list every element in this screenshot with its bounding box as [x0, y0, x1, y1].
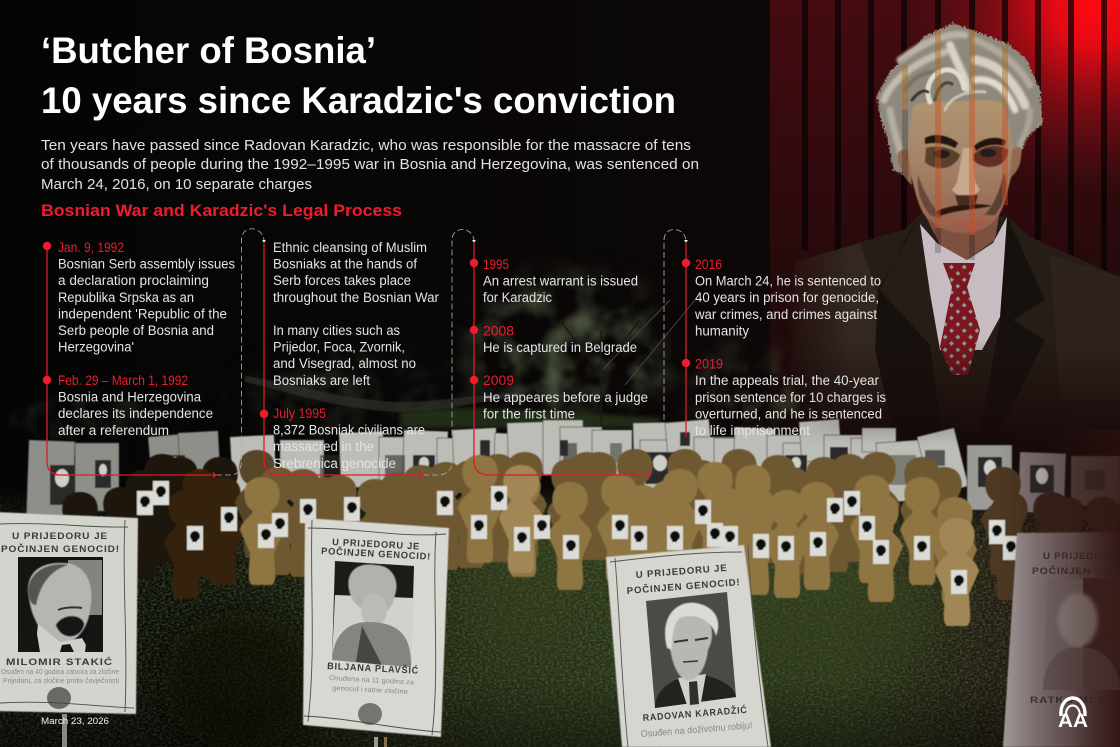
timeline column 2: Bosniaks are left [273, 373, 370, 388]
timeline column 4: 2019 [695, 357, 723, 372]
timeline column 2: Bosniaks at the hands of [273, 257, 417, 272]
intro paragraph: Ten years have passed since Radovan Karadzic, who was responsible for the massacre of tens [41, 137, 691, 154]
child photo cards [137, 481, 1019, 594]
timeline column 2: and Visegrad, almost no [273, 356, 416, 371]
poster: Biljana Plavsic: genocid i ratne zločine [332, 685, 408, 696]
timeline column 2: Prijedor, Foca, Zvornik, [273, 340, 405, 355]
timeline column 3: for Karadzic [483, 290, 552, 305]
poster: Milomir Stakic: Osuđen na 40 godina zatvora za zločine [1, 669, 119, 676]
title: ‘Butcher of Bosnia’ [41, 30, 376, 71]
timeline column 4: 2016 [695, 257, 722, 272]
poster: Milomir Stakic: POČINJEN GENOCID! [1, 543, 120, 555]
timeline column 3: He is captured in Belgrade [483, 340, 637, 355]
timeline column 1: declares its independence [58, 406, 213, 421]
date: March 23, 2026 [41, 716, 109, 726]
tie [940, 263, 980, 375]
timeline dots [43, 242, 690, 418]
timeline column 3: He appeares before a judge [483, 390, 648, 405]
timeline column 2: massacred in the [273, 439, 374, 454]
poster: Milomir Stakic: MILOMIR STAKIĆ [6, 656, 113, 668]
timeline column 3: 1995 [483, 257, 509, 272]
timeline column 1 [58, 240, 235, 438]
intro paragraph: March 24, 2016, on 10 separate charges [41, 176, 312, 193]
timeline column 2: throughout the Bosnian War [273, 290, 439, 305]
timeline column 4: On March 24, he is sentenced to [695, 274, 881, 289]
cut-out child figures [58, 449, 1120, 626]
poster: Radovan Karadzic: POČINJEN GENOCID! [626, 576, 741, 597]
timeline column 4: to life imprisonment [695, 423, 810, 438]
poster: Biljana Plavsic [303, 518, 449, 747]
timeline column 4: 40 years in prison for genocide, [695, 290, 879, 305]
poster: Ratko Mladic: U PRIJEDORU [1043, 551, 1118, 562]
shirt [920, 217, 1007, 350]
facial shadows [918, 135, 1008, 229]
timeline column 1: Bosnian Serb assembly issues [58, 257, 235, 272]
timeline column 4: war crimes, and crimes against [694, 307, 877, 322]
timeline column 1: Bosnia and Herzegovina [58, 390, 201, 405]
timeline column 1: Republika Srpska as an [58, 290, 194, 305]
photo: grass field [0, 480, 1120, 747]
face [908, 100, 1014, 233]
timeline column 1: Serb people of Bosnia and [58, 323, 214, 338]
icon: AA logo: AA [1058, 711, 1088, 732]
poster: Ratko Mladic: POČINJEN GEN [1032, 565, 1120, 577]
poster: Radovan Karadzic: Osuđen na doživotnu robiju! [640, 720, 753, 740]
poster: Milomir Stakic [0, 512, 138, 747]
portrait: Radovan Karadzic [790, 23, 1120, 460]
timeline column 2: Ethnic cleansing of Muslim [273, 240, 427, 255]
timeline column 1: Feb. 29 – March 1, 1992 [58, 373, 188, 388]
orange stripes over hair and face [902, 30, 1008, 260]
timeline column 4: In the appeals trial, the 40-year [695, 373, 879, 388]
timeline column 1: after a referendum [58, 423, 169, 438]
timeline column 2: Serb forces takes place [273, 273, 411, 288]
timeline column 2: 8,372 Bosniak civilians are [273, 423, 425, 438]
timeline column 3: 2009 [483, 373, 514, 388]
timeline column 3: An arrest warrant is issued [483, 274, 638, 289]
poster: Biljana Plavsic: POČINJEN GENOCID! [321, 545, 431, 563]
poster: Ratko Mladic [1003, 532, 1120, 747]
title: 10 years since Karadzic's conviction [41, 80, 676, 121]
neck [925, 210, 1000, 260]
timeline column 3: for the first time [483, 406, 575, 421]
poster: Radovan Karadzic: U PRIJEDORU JE [635, 563, 728, 581]
poster: Biljana Plavsic: U PRIJEDORU JE [332, 537, 420, 553]
timeline column 1: Jan. 9, 1992 [58, 240, 124, 255]
timeline column 4 [694, 257, 886, 438]
timeline column 1: Herzegovina' [58, 340, 134, 355]
timeline connectors [47, 229, 688, 478]
timeline column 4: prison sentence for 10 charges is [695, 390, 886, 405]
intro paragraph: of thousands of people during the 1992–1995 war in Bosnia and Herzegovina, was sentenced on [41, 156, 699, 173]
hair mass [877, 23, 1043, 178]
timeline column 1: a declaration proclaiming [58, 273, 209, 288]
forehead curl [912, 70, 985, 110]
title [41, 30, 676, 121]
back row of posters [26, 419, 1120, 516]
poster: Milomir Stakic: Prijedoru, za zločine protiv čovječnosti [3, 678, 119, 685]
faces on back posters [55, 455, 1048, 487]
intro paragraph [41, 137, 699, 193]
poster: Biljana Plavsic: Osuđena na 11 godina za [329, 675, 414, 686]
icon: AA logo [1058, 698, 1088, 732]
timeline column 4: overturned, and he is sentenced [695, 406, 882, 421]
poster: Radovan Karadzic [606, 545, 771, 747]
timeline column 2: Srebrenica genocide [273, 456, 396, 471]
poster: Milomir Stakic: U PRIJEDORU JE [12, 531, 108, 542]
right edge fade [1000, 430, 1120, 747]
timeline column 3: 2008 [483, 323, 514, 338]
section heading: Bosnian War and Karadzic's Legal Process [41, 201, 402, 220]
panel: red striped backdrop [770, 0, 1120, 470]
back poster photos [50, 432, 1105, 505]
ears [898, 147, 1021, 185]
suit [790, 214, 1120, 460]
poster: Ratko Mladic: RATKO MLA [1030, 695, 1106, 706]
poster: Biljana Plavsic: BILJANA PLAVŠIĆ [327, 660, 419, 677]
timeline column 2: July 1995 [273, 406, 326, 421]
timeline column 3 [483, 257, 648, 421]
photo: dark park trees and path [10, 266, 800, 438]
timeline column 1: independent 'Republic of the [58, 306, 227, 321]
poster: Radovan Karadzic: RADOVAN KARADŽIĆ [642, 704, 748, 724]
hair strands [884, 35, 1030, 165]
timeline column 2 [273, 240, 439, 471]
timeline column 2: In many cities such as [273, 323, 400, 338]
timeline column 4: humanity [695, 323, 749, 338]
